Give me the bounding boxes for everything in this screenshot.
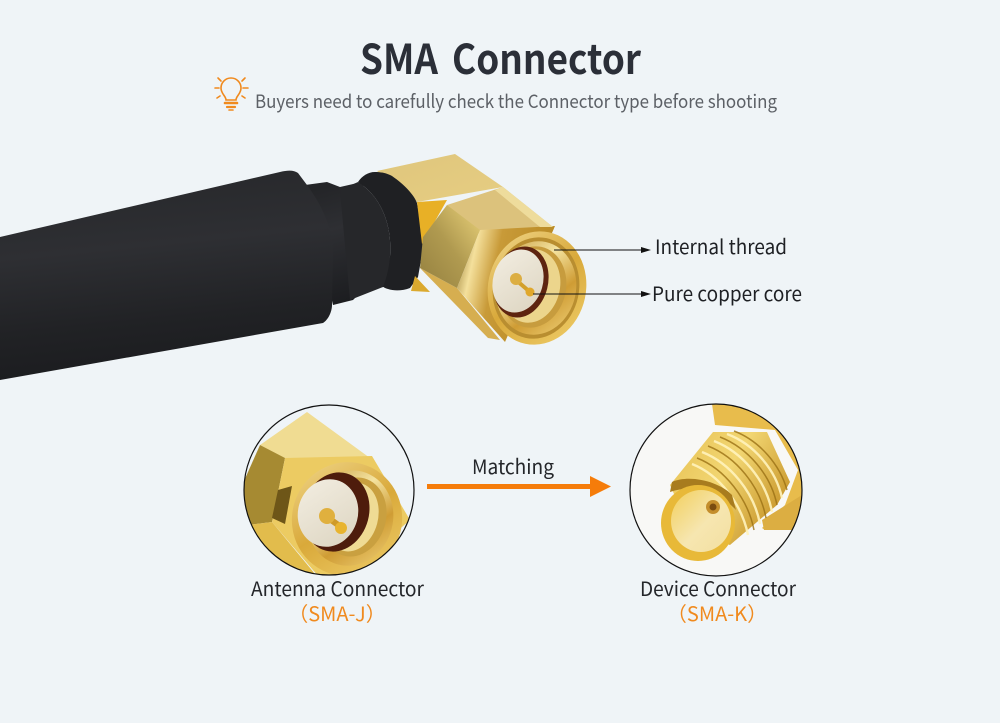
callout: pure copper core: Pure copper core [652,278,802,307]
subtitle: Buyers need to carefully check the Connector type before shooting [255,87,777,114]
title [360,26,641,86]
arrow: matching [427,476,611,497]
label: antenna connector: Antenna Connector [251,573,424,602]
callout: internal thread [554,231,787,260]
threaded ring [477,222,597,354]
icon: light bulb [215,78,248,110]
cable heat-shrink sleeve [0,171,333,380]
bright solder joints [417,200,447,244]
label: SMA-J: （SMA-J） [288,598,386,627]
label: SMA-K: （SMA-K） [667,598,767,627]
hex left face [244,445,285,524]
title: SMA [360,26,439,86]
callout: pure copper core [533,278,802,307]
panel: device connector circle [630,400,810,576]
mouth [661,485,735,561]
cable neck [305,182,400,305]
collar infill [340,182,390,300]
callout: internal thread: Internal thread [655,231,787,260]
hex nut [420,187,555,342]
insulator [298,479,358,547]
threaded ring [292,462,402,574]
title: Connector [452,26,641,86]
label: device connector: Device Connector [640,573,796,602]
dark cavity [486,241,556,323]
label: matching: Matching [472,451,554,480]
collar band [670,479,736,510]
gold elbow body [377,154,503,202]
elbow face [260,412,370,460]
rubber collar [358,172,424,290]
panel: antenna connector circle [240,405,415,590]
centre pin [516,280,530,292]
centre socket [706,500,720,514]
hex body [272,456,409,574]
flange [712,404,802,530]
insulator disc [485,243,551,319]
threaded barrel [670,432,790,545]
main photo: antenna cable with SMA connector [0,154,597,380]
